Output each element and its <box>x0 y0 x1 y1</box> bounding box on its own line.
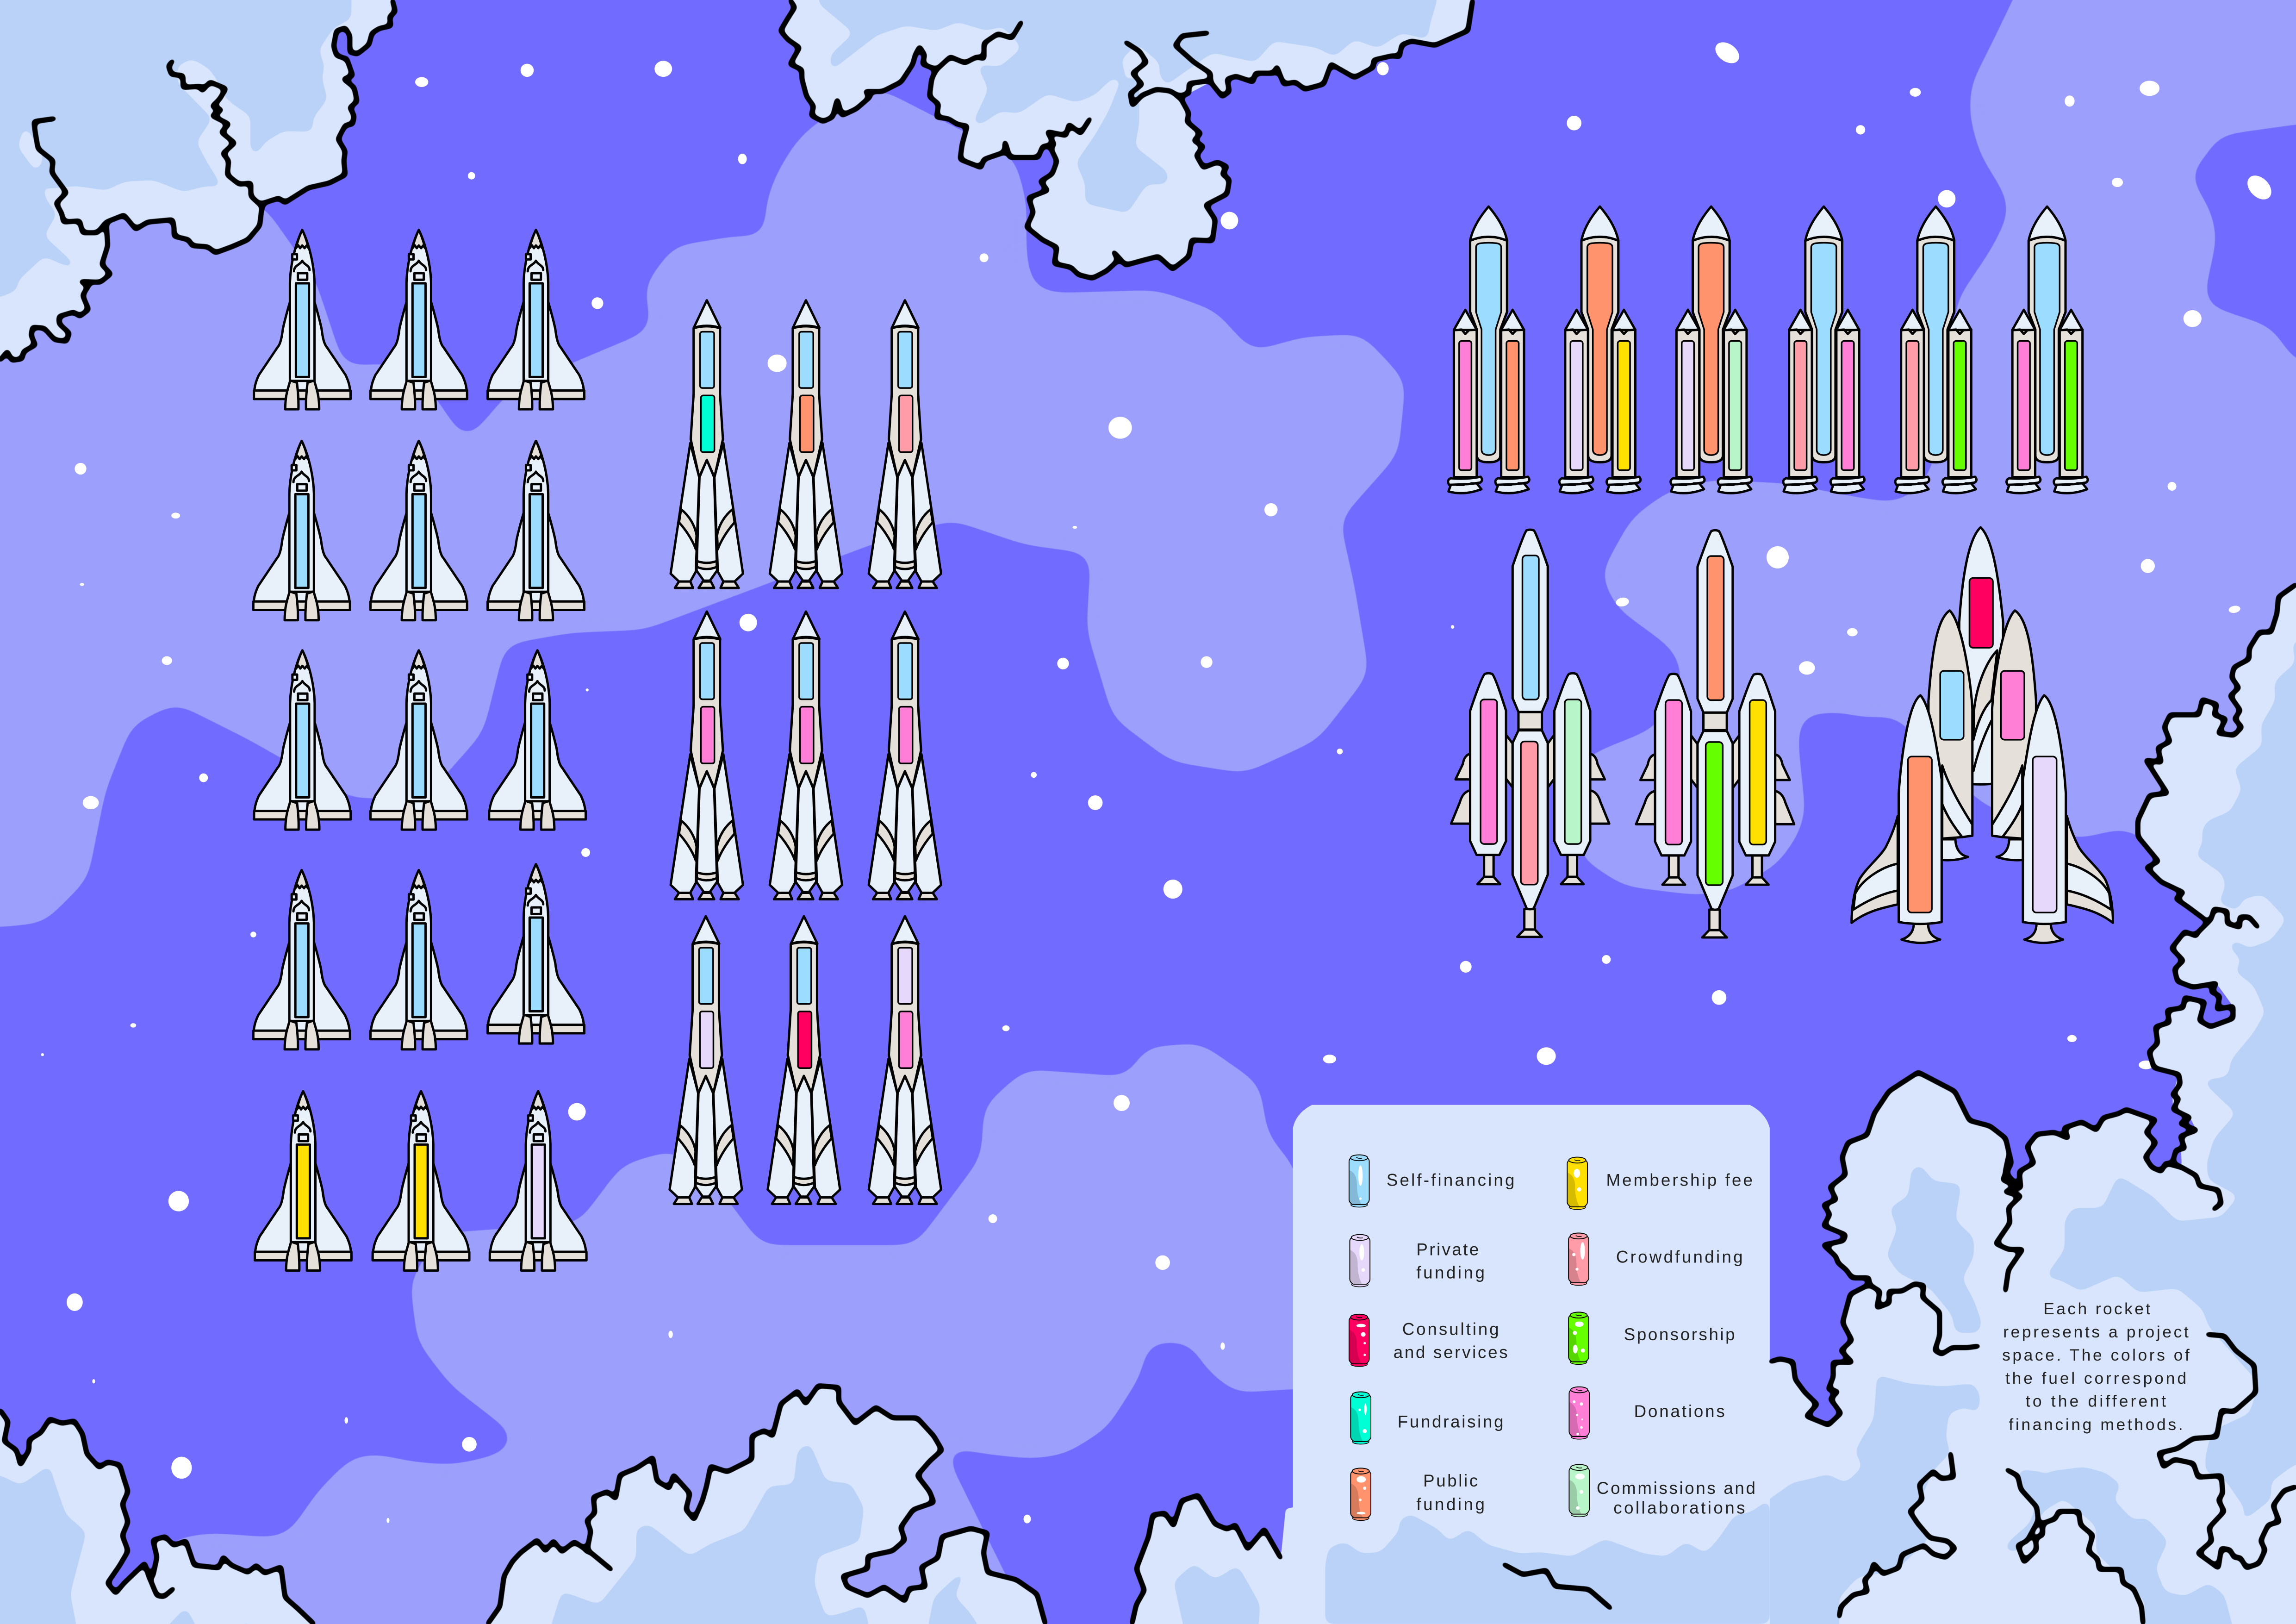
rocket: two-stage row 2 middle <box>770 612 842 899</box>
rockets: two-stage fleet (three rows of three) <box>670 300 941 1204</box>
text block: explanatory note: represents a project <box>2003 1323 2189 1341</box>
rocket: triple-core 4 <box>1783 206 1865 493</box>
rocket: two-stage row 1 left <box>671 300 743 588</box>
rocket: triple-core 2 <box>1559 206 1641 493</box>
text block: explanatory note <box>2002 1299 2190 1434</box>
rocket: two-stage row 3 right <box>869 916 941 1204</box>
rocket: five-body cluster <box>1852 527 2113 943</box>
rocket: shuttle row 2 left <box>253 441 350 620</box>
legend item: membership fee: Membership fee <box>1606 1171 1753 1190</box>
legend item: self-financing: Self-financing <box>1387 1171 1514 1190</box>
legend item: fundraising <box>1350 1392 1504 1444</box>
legend item: donations: Donations <box>1634 1402 1725 1421</box>
cluster: middle right rocket <box>1992 611 2036 860</box>
rocket: two-stage row 2 left <box>671 612 743 899</box>
rocket: two-stage row 1 right <box>869 300 941 588</box>
legend item: commissions and collaborations: Commissions and <box>1597 1479 1755 1498</box>
rocket: shuttle row 3 right <box>489 650 586 830</box>
rocket: shuttle row 4 middle <box>370 870 467 1049</box>
legend item: crowdfunding: Crowdfunding <box>1616 1247 1743 1266</box>
legend item: consulting and services <box>1349 1314 1508 1367</box>
rocket: triple-core 5 <box>1895 206 1977 493</box>
rocket: triple-core 3 <box>1671 206 1752 493</box>
rockets: shuttle fleet (five rows of three) <box>253 230 586 1271</box>
legend item: public funding: funding <box>1416 1495 1485 1514</box>
rocket: shuttle row 1 left <box>254 230 350 409</box>
cluster: rear centre rocket <box>1959 527 2003 784</box>
rocket: shuttle row 5 right <box>490 1091 586 1271</box>
text block: explanatory note: to the different <box>2026 1392 2166 1410</box>
legend item: sponsorship <box>1568 1312 1735 1364</box>
rocket: shuttle row 4 right <box>488 864 584 1043</box>
legend item: consulting and services: Consulting <box>1402 1320 1499 1339</box>
panel: legend <box>1293 1105 1770 1624</box>
rocket: shuttle row 3 middle <box>370 650 467 830</box>
legend item: commissions and collaborations <box>1569 1464 1755 1518</box>
cluster: front left rocket <box>1852 695 1941 943</box>
rocket: two-stage row 3 left <box>670 916 742 1204</box>
legend item: donations <box>1569 1387 1725 1439</box>
rocket: two-stage row 1 middle <box>770 300 842 588</box>
rocket: shuttle row 2 right <box>488 441 584 620</box>
legend item: fundraising: Fundraising <box>1398 1412 1504 1431</box>
text block: explanatory note: Each rocket <box>2043 1299 2150 1318</box>
legend item: private funding <box>1350 1235 1485 1287</box>
rocket: heavy lifter right <box>1636 530 1794 937</box>
legend item: self-financing <box>1349 1155 1514 1207</box>
rockets: triple-core fleet (six) <box>1448 206 2088 493</box>
rocket: shuttle row 1 middle <box>370 230 467 409</box>
rocket: two-stage row 2 right <box>869 612 941 899</box>
rocket: shuttle row 5 left <box>255 1091 351 1271</box>
rocket: triple-core 1 <box>1448 206 1529 493</box>
legend item: commissions and collaborations: collaborations <box>1613 1499 1745 1518</box>
cluster: middle left rocket <box>1929 611 1972 860</box>
text block: explanatory note: financing methods. <box>2009 1415 2183 1434</box>
rocket: shuttle row 3 left <box>254 650 351 830</box>
rocket: shuttle row 4 left <box>253 870 350 1049</box>
cluster: front right rocket <box>2023 695 2113 943</box>
legend item: public funding <box>1350 1468 1485 1520</box>
rocket: triple-core 6 <box>2006 206 2088 493</box>
rocket: two-stage row 3 middle <box>768 916 840 1204</box>
legend item: crowdfunding <box>1568 1233 1743 1285</box>
rocket: shuttle row 2 middle <box>370 441 467 620</box>
legend item: consulting and services: and services <box>1394 1343 1508 1362</box>
legend item: membership fee <box>1567 1157 1753 1210</box>
text block: explanatory note: the fuel correspond <box>2005 1369 2186 1387</box>
legend item: private funding: funding <box>1416 1263 1485 1282</box>
rocket: heavy lifter left <box>1451 530 1609 937</box>
legend item: public funding: Public <box>1423 1471 1478 1490</box>
text block: explanatory note: space. The colors of <box>2002 1346 2190 1364</box>
rocket: shuttle row 5 middle <box>373 1091 469 1271</box>
legend item: private funding: Private <box>1416 1240 1479 1259</box>
legend item: sponsorship: Sponsorship <box>1624 1325 1735 1344</box>
rocket: shuttle row 1 right <box>488 230 584 409</box>
